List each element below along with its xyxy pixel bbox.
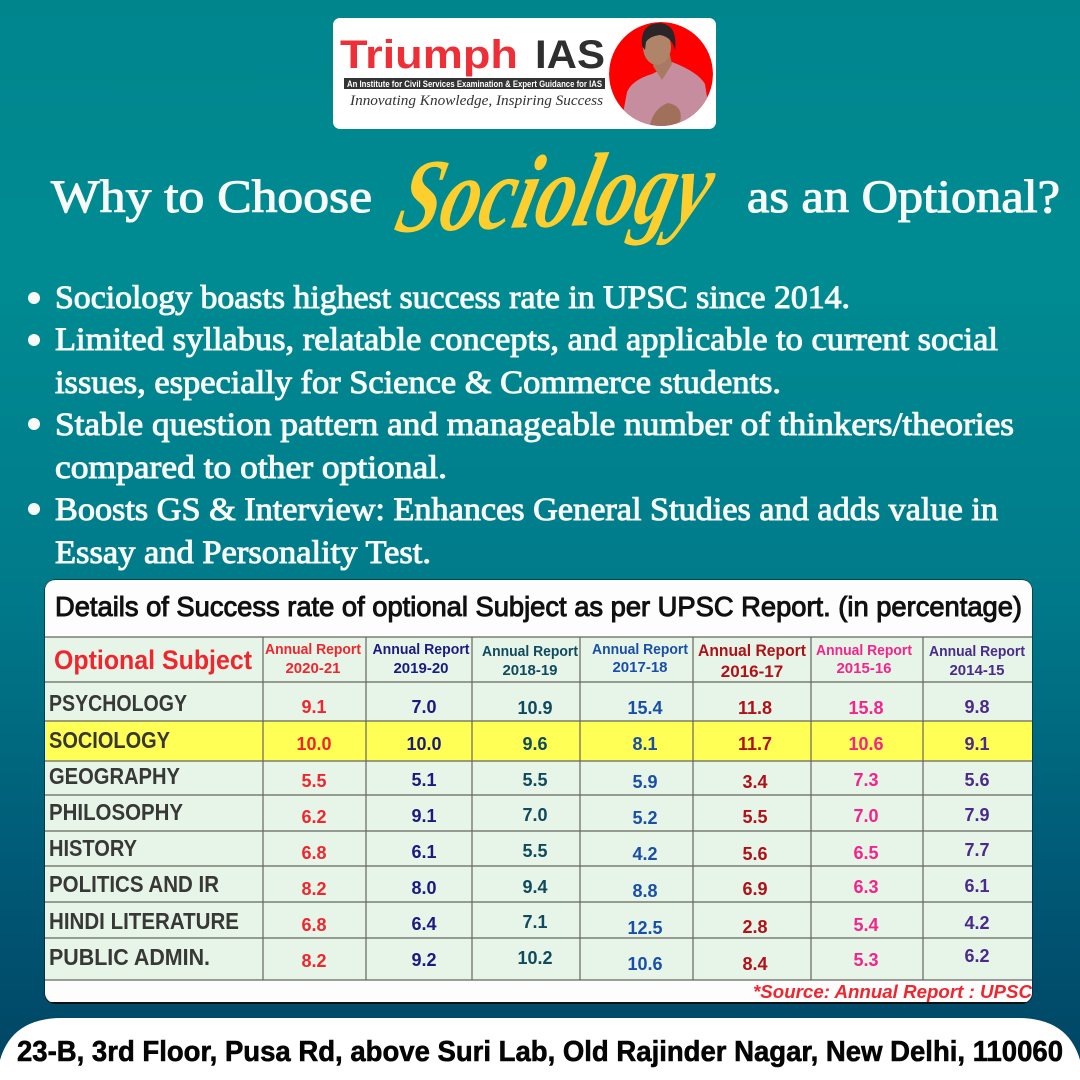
row: public admin: 5.3	[853, 950, 879, 970]
row: hindi literature: 7.1	[522, 912, 548, 932]
bullet list	[28, 280, 1014, 571]
row: hindi literature: 12.5	[627, 918, 663, 938]
bullet 2: issues, especially for Science & Commerce students.	[55, 365, 781, 401]
table header: Annual Report	[929, 643, 1025, 660]
row: sociology: 9.6	[522, 734, 548, 754]
row: philosophy: 9.1	[411, 806, 437, 826]
row: psychology: 15.8	[848, 698, 884, 718]
row: politics and IR: 6.9	[742, 879, 768, 899]
row: history: 5.5	[522, 841, 548, 861]
table header: Annual Report	[482, 643, 578, 660]
logo wordmark: Triumph: Triumph	[340, 33, 518, 77]
row: hindi literature: 2.8	[742, 917, 768, 937]
row: politics and IR: 8.2	[301, 879, 327, 899]
bullet 3	[28, 407, 1014, 486]
row: philosophy: 7.9	[964, 805, 990, 825]
success rate table	[45, 580, 1033, 1002]
row: psychology: 15.4	[627, 698, 663, 718]
row: history: 5.6	[742, 844, 768, 864]
row: geography: 5.1	[411, 770, 437, 790]
row: public admin	[50, 949, 989, 970]
table title: Details of Success rate of optional Subject as per UPSC Report. (in percentage)	[55, 591, 1022, 622]
bullet 2	[28, 322, 998, 401]
row: sociology: 11.7	[738, 734, 772, 754]
table header: Optional Subject	[54, 645, 252, 675]
row: public admin: 9.2	[411, 950, 437, 970]
bullet 4: Boosts GS & Interview: Enhances General Studies and adds value in	[55, 492, 998, 528]
table header: Annual Report	[698, 641, 806, 660]
row: psychology: PSYCHOLOGY	[49, 690, 187, 716]
row: geography: 5.5	[301, 771, 327, 791]
table header: 2015-16	[836, 660, 892, 677]
bullet 1: Sociology boasts highest success rate in UPSC since 2014.	[55, 280, 850, 316]
row: hindi literature: HINDI LITERATURE	[49, 908, 239, 934]
row: psychology: 9.1	[301, 697, 327, 717]
row: politics and IR: 9.4	[522, 877, 548, 897]
table header: Annual Report	[372, 641, 470, 658]
row: public admin: PUBLIC ADMIN.	[49, 944, 210, 970]
row: hindi literature: 6.4	[411, 914, 437, 934]
row: hindi literature: 6.8	[301, 915, 327, 935]
logo strapline bar: An Institute for Civil Services Examination & Expert Guidance for IAS	[347, 79, 602, 89]
row: sociology	[50, 732, 989, 750]
row: philosophy: 7.0	[522, 805, 548, 825]
table header: 2020-21	[285, 660, 341, 677]
row: psychology	[50, 695, 989, 714]
row: sociology: 9.1	[964, 734, 990, 754]
row: philosophy	[50, 804, 989, 824]
row: sociology: 10.6	[848, 734, 884, 754]
portrait in red circle	[609, 22, 713, 130]
row: geography: 5.9	[632, 772, 658, 792]
source note: *Source: Annual Report : UPSC	[753, 982, 1033, 1002]
logo tagline: Innovating Knowledge, Inspiring Success	[349, 93, 603, 109]
bullet 3: compared to other optional.	[55, 450, 447, 486]
row: public admin: 8.4	[742, 954, 768, 974]
table header	[55, 643, 1025, 677]
row: public admin: 10.6	[627, 954, 663, 974]
bullet 4: Essay and Personality Test.	[55, 535, 431, 571]
row: hindi literature	[50, 913, 989, 934]
row: hindi literature: 5.4	[853, 915, 879, 935]
title	[51, 127, 1060, 255]
row: history: 6.1	[411, 842, 437, 862]
row: politics and IR: POLITICS AND IR	[49, 871, 219, 897]
row: geography: GEOGRAPHY	[49, 763, 180, 789]
footer address bar	[0, 1018, 1080, 1080]
row: hindi literature: 4.2	[964, 913, 990, 933]
table header: Annual Report	[592, 641, 688, 658]
row: philosophy: 5.2	[632, 808, 658, 828]
row: public admin: 10.2	[517, 948, 553, 968]
title part: Sociology script: Sociology	[386, 127, 728, 255]
row: history: 4.2	[632, 844, 658, 864]
row: philosophy: 6.2	[301, 807, 327, 827]
table header: 2017-18	[612, 659, 668, 676]
row: public admin: 8.2	[301, 951, 327, 971]
row: geography: 7.3	[853, 770, 879, 790]
row: public admin: 6.2	[964, 946, 990, 966]
row: psychology: 10.9	[517, 698, 553, 718]
row: sociology: 10.0	[296, 734, 332, 754]
table header: Annual Report	[265, 641, 361, 658]
row: philosophy: 5.5	[742, 807, 768, 827]
logo card	[333, 18, 716, 130]
row: geography: 3.4	[742, 772, 768, 792]
row: history	[50, 840, 989, 860]
row: geography: 5.5	[522, 770, 548, 790]
row: psychology: 7.0	[411, 697, 437, 717]
highlighted sociology row	[46, 721, 1032, 761]
table header: 2016-17	[721, 662, 783, 681]
row: history: 6.5	[853, 843, 879, 863]
bullet 2: Limited syllabus, relatable concepts, and applicable to current social	[55, 322, 998, 358]
row: philosophy: PHILOSOPHY	[49, 799, 183, 825]
row: philosophy: 7.0	[853, 806, 879, 826]
title part: Why to Choose: Why to Choose	[51, 171, 372, 223]
row: history: HISTORY	[49, 835, 137, 861]
row: psychology: 9.8	[964, 697, 990, 717]
row: geography: 5.6	[964, 770, 990, 790]
row: history: 6.8	[301, 843, 327, 863]
table header: Annual Report	[816, 642, 912, 659]
row: politics and IR: 8.8	[632, 881, 658, 901]
row: history: 7.7	[964, 840, 990, 860]
row: sociology: SOCIOLOGY	[49, 727, 170, 753]
row: politics and IR	[50, 876, 989, 897]
row: sociology: 10.0	[406, 734, 442, 754]
table header: 2014-15	[949, 662, 1005, 679]
row: politics and IR: 6.3	[853, 877, 879, 897]
row: sociology: 8.1	[632, 734, 658, 754]
bullet 3: Stable question pattern and manageable number of thinkers/theories	[55, 407, 1014, 443]
title part: as an Optional: as an Optional?	[747, 171, 1060, 223]
row: psychology: 11.8	[738, 698, 772, 718]
table header: 2019-20	[393, 660, 449, 677]
table header: 2018-19	[502, 662, 558, 679]
row: politics and IR: 6.1	[964, 876, 990, 896]
bullet 4	[28, 492, 998, 571]
row: politics and IR: 8.0	[411, 878, 437, 898]
row: geography	[50, 768, 989, 788]
logo wordmark: IAS: IAS	[535, 33, 605, 77]
table card outline	[45, 580, 1032, 1004]
